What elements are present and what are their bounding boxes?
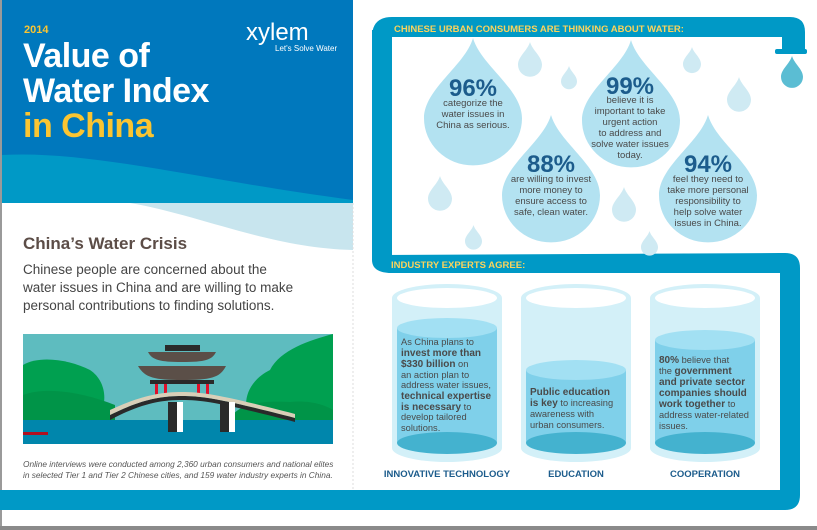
cylinder: innovative technology: technical expertise	[401, 391, 491, 402]
drop: 88%: more money to	[519, 185, 583, 196]
drop: 99%: urgent action	[603, 117, 657, 128]
cylinder: innovative technology	[384, 284, 511, 480]
drop: 88%: 88%	[527, 151, 575, 178]
cylinder: innovative technology: solutions.	[401, 423, 440, 433]
pipe labels: CHINESE URBAN CONSUMERS ARE THINKING ABOUT WATER:	[394, 24, 684, 35]
cylinder: innovative technology: As China plans to	[401, 337, 474, 347]
drop: 99%: today.	[617, 150, 643, 161]
cylinder: cooperation	[650, 284, 760, 480]
illustration: bridge and pavilion	[23, 334, 333, 444]
cylinder: innovative technology: develop tailored	[401, 412, 467, 422]
footnote: Online interviews were conducted among 2,360 urban consumers and national elites	[23, 459, 333, 469]
cylinder: innovative technology: an action plan to	[401, 370, 469, 380]
drop: 99%: believe it is	[606, 95, 654, 106]
cylinder: cooperation: COOPERATION	[670, 469, 740, 480]
cylinder: education: EDUCATION	[548, 469, 604, 480]
cylinder: education	[521, 284, 631, 480]
title: in China	[23, 107, 155, 145]
drop: 88%	[502, 115, 600, 242]
intro text: Chinese people are concerned about the	[23, 262, 267, 277]
footnote: in selected Tier 1 and Tier 2 Chinese cities, and 159 water industry experts in China.	[23, 470, 333, 480]
drop: 88%: ensure access to	[515, 196, 587, 207]
cylinder: education: is key to increasing	[530, 398, 613, 409]
drop: 94%: issues in China.	[674, 218, 742, 229]
drop: 99%: solve water issues	[591, 139, 669, 150]
title: Water Index	[23, 72, 210, 110]
drop: 96%: 96%	[449, 75, 497, 102]
cylinder: cooperation: work together to	[658, 399, 735, 410]
drop: 94%: take more personal	[667, 185, 749, 196]
cylinder: cooperation: companies should	[659, 388, 747, 399]
cylinder: innovative technology: INNOVATIVE TECHNOLOGY	[384, 469, 511, 480]
drop: 88%: are willing to invest	[511, 174, 591, 185]
cylinder: innovative technology: invest more than	[401, 348, 481, 359]
drop: 94%: help solve water	[674, 207, 742, 218]
cylinder: innovative technology: address water issues,	[401, 380, 491, 390]
drop: 96%: categorize the	[443, 98, 503, 109]
drop: 88%: safe, clean water.	[514, 207, 588, 218]
cylinder: cooperation: the government	[659, 366, 732, 377]
drop: 94%: 94%	[684, 151, 732, 178]
drop: 96%: China as serious.	[436, 120, 510, 131]
intro text: personal contributions to finding solutions.	[23, 298, 274, 313]
cylinder: education: awareness with	[530, 409, 594, 419]
text: INDUSTRY EXPERTS AGREE:	[391, 260, 525, 271]
drop: 96%	[424, 38, 522, 165]
logo: xylem: Let's Solve Water	[275, 44, 337, 53]
cylinder: cooperation: and private sector	[659, 377, 745, 388]
drop: 99%	[582, 40, 680, 167]
cylinder: education: Public education	[530, 387, 610, 398]
cylinder: innovative technology: is necessary to	[401, 402, 471, 413]
cylinder: innovative technology: $330 billion on	[401, 359, 468, 370]
logo: xylem	[246, 19, 337, 53]
title	[23, 24, 210, 145]
drop: 99%: to address and	[599, 128, 661, 139]
drop: 99%: 99%	[606, 73, 654, 100]
faucet drop	[781, 56, 803, 88]
cylinder: cooperation: issues.	[659, 421, 688, 431]
intro text	[22, 262, 293, 313]
logo: xylem: xylem	[246, 19, 309, 46]
cylinder: cooperation: 80% believe that	[659, 355, 730, 366]
drop: 96%: water issues in	[441, 109, 504, 120]
small decorative drops	[428, 42, 751, 256]
drop: 94%	[659, 115, 757, 242]
footnote	[23, 459, 333, 480]
drop: 99%: important to take	[595, 106, 665, 117]
drop: 94%: responsibility to	[675, 196, 741, 207]
left panel background	[0, 0, 353, 530]
cylinder: cooperation: address water-related	[659, 410, 749, 420]
heading: China's Water Crisis: China’s Water Crisis	[23, 234, 187, 253]
bottom border	[0, 526, 817, 530]
title: 2014	[24, 24, 49, 36]
cylinder: education: urban consumers.	[530, 420, 604, 430]
drop: 94%: feel they need to	[673, 174, 743, 185]
title: Value of	[23, 37, 151, 75]
intro text: water issues in China and are willing to make	[22, 280, 293, 295]
